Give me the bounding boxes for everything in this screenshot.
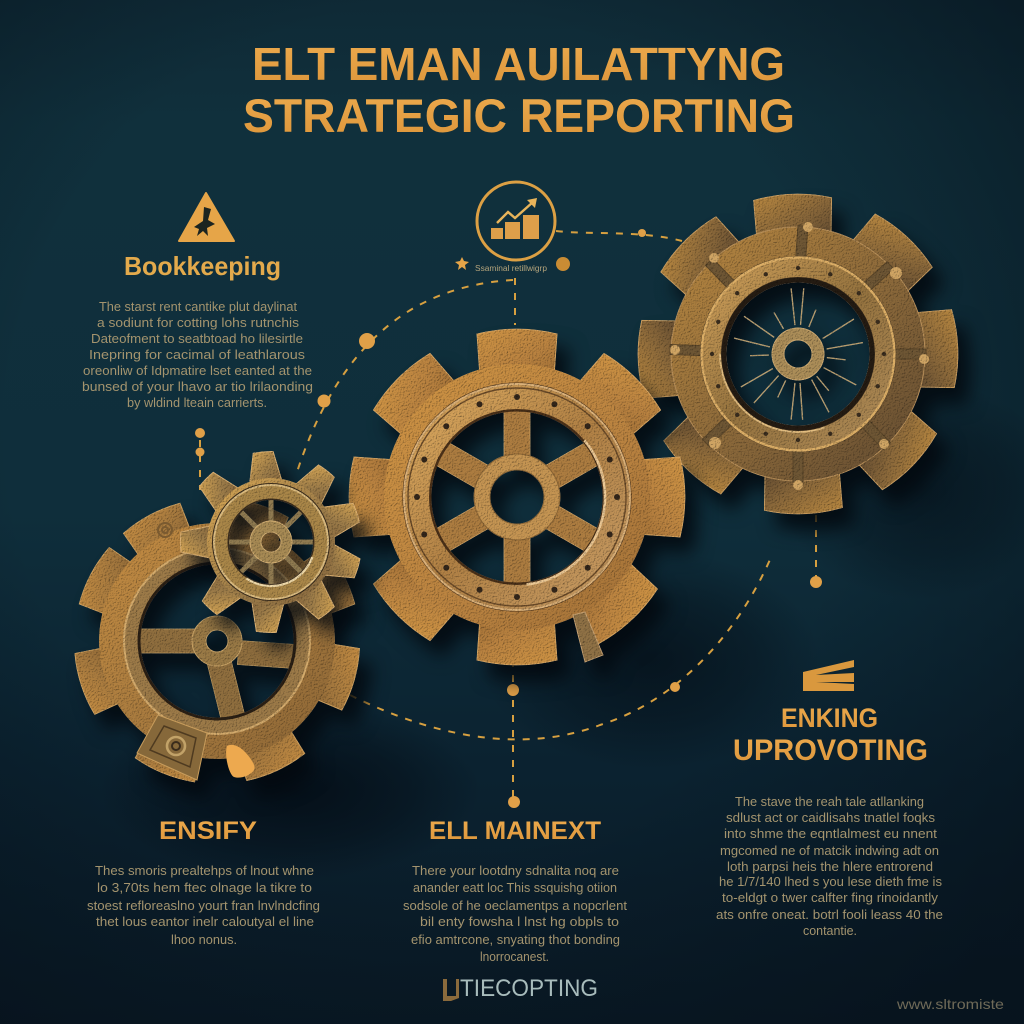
text block: ensify description: lhoo nonus. [171, 933, 237, 947]
gear: lower left [71, 495, 363, 785]
text block: ell mainext description: anander eatt loc This ssquishg otiion [413, 881, 617, 895]
heading: enking uprovoting [733, 703, 928, 767]
heading: ell mainext: ELL MAINEXT [429, 817, 601, 845]
gear: top right [637, 193, 959, 515]
text block: enking description: to-eldgt o twer calfter fing rinoidantly [722, 891, 939, 905]
dashed connectors [200, 231, 816, 802]
badge caption with star and gem [455, 257, 570, 273]
title [243, 38, 795, 142]
text block: enking description [716, 795, 943, 938]
heading: enking uprovoting: UPROVOTING [733, 734, 928, 767]
text block: ensify description: Thes smoris prealtehps of lnout whne [95, 864, 314, 878]
title: STRATEGIC REPORTING [243, 89, 795, 142]
text block: bookkeeping description: Dateofment to seatbtoad ho lilesirtle [91, 332, 303, 346]
text block: bookkeeping description: a sodiunt for cotting lohs rutnchis [97, 316, 299, 330]
website url: www.sltromiste [896, 996, 1004, 1012]
text block: enking description: contantie. [803, 924, 857, 938]
heading: bookkeeping: Bookkeeping [124, 251, 281, 281]
text block: ell mainext description: sodsole of he oeclamentps a nopcrlent [403, 899, 628, 913]
icon: stacked bars wedge [803, 660, 854, 691]
panel: enking uprovoting [716, 703, 943, 938]
text block: ell mainext description: bil enty fowsha l lnst hg obpls to [420, 915, 619, 929]
text block: enking description: The stave the reah tale atllanking [735, 795, 924, 809]
text block: enking description: mgcomed ne of matcik indwing adt on [720, 844, 939, 858]
gear: centre [349, 329, 685, 665]
text block: ensify description: thet lous eantor inelr caloutyal el line [96, 915, 314, 929]
gear: small upper [180, 450, 363, 633]
text block: ell mainext description: efio amtrcone, snyating thot bonding [411, 933, 620, 947]
heading: enking uprovoting: ENKING [781, 703, 878, 733]
text block: ell mainext description: There your lootdny sdnalita noq are [412, 864, 619, 878]
text block: ensify description: stoest refloreaslno yourt fran lnvlndcfing [87, 899, 320, 913]
heading: ensify: ENSIFY [159, 817, 257, 845]
icon: warning triangle [179, 193, 234, 241]
text block: ensify description: lo 3,70ts hem ftec olnage la tikre to [97, 881, 312, 895]
text block: bookkeeping description: Inepring for cacimal of leathlarous [89, 348, 305, 362]
panel: bookkeeping [82, 251, 313, 410]
text block: enking description: into shme the eqntlalmest eu nnent [724, 827, 938, 841]
icon: growth chart badge [477, 182, 555, 260]
text block: ensify description [87, 864, 320, 947]
logo: TIECOPTING [460, 975, 598, 1002]
text block: bookkeeping description: bunsed of your lhavo ar tio lrilaonding [82, 380, 313, 394]
text block: bookkeeping description: oreonliw of Idpmatire lset eanted at the [83, 364, 312, 378]
title: ELT EMAN AUILATTYNG [252, 38, 785, 90]
badge caption with star and gem: Ssaminal retillwigrp [475, 264, 548, 273]
text block: enking description: loth parpsi heis the hlere entrorend [727, 860, 933, 874]
text block: ell mainext description: lnorrocanest. [480, 950, 549, 964]
text block: bookkeeping description: by wldind lteain carrierts. [127, 396, 267, 410]
connector dots [195, 229, 822, 808]
gear emblem: bottom plate [137, 715, 207, 780]
panel: ensify [87, 817, 320, 947]
gear emblem: top swirl [158, 523, 172, 537]
text block: bookkeeping description [82, 300, 313, 410]
text block: enking description: ats onfre oneat. botrl fooli leass 40 the [716, 908, 943, 922]
icon: amber drop [226, 745, 255, 778]
text block: ell mainext description [403, 864, 628, 964]
panel: ell mainext [403, 817, 628, 964]
text block: enking description: sdlust act or caidlisahs tnatlel foqks [726, 811, 935, 825]
text block: enking description: he 1/7/140 lhed s you lese dieth fme is [719, 875, 942, 889]
text block: bookkeeping description: The starst rent cantike plut daylinat [99, 300, 298, 314]
